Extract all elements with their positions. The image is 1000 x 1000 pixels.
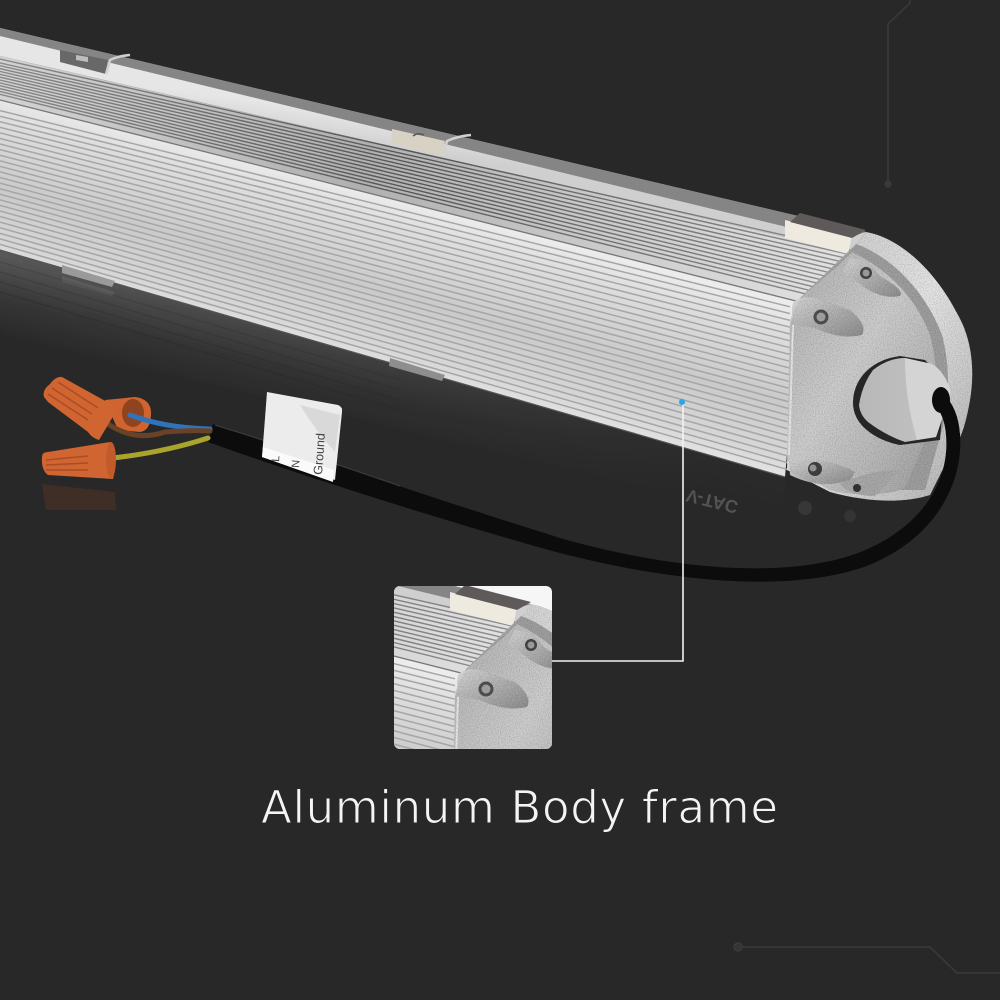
lamp reflection on floor: V-TAC <box>684 485 740 517</box>
orange wire connector: cup <box>105 397 151 432</box>
cable label tag: Ground <box>311 433 328 475</box>
title: Aluminum Body frame <box>261 781 778 834</box>
cable gland <box>853 356 953 445</box>
cable label tag <box>262 392 342 482</box>
colored wires <box>108 415 210 458</box>
inset detail photo <box>394 586 552 749</box>
cable label tag: N <box>290 459 303 468</box>
orange wire connectors <box>42 377 118 479</box>
connector reflection <box>42 484 116 510</box>
circuit line: top right <box>885 0 910 187</box>
power cable <box>208 424 960 582</box>
leader line from lamp to inset <box>552 404 683 661</box>
LED batten lamp body <box>0 28 980 510</box>
circuit line: bottom right <box>734 943 1000 973</box>
lamp reflection on floor <box>0 250 856 522</box>
cable label tag: L <box>270 455 282 462</box>
callout dot <box>679 399 685 405</box>
